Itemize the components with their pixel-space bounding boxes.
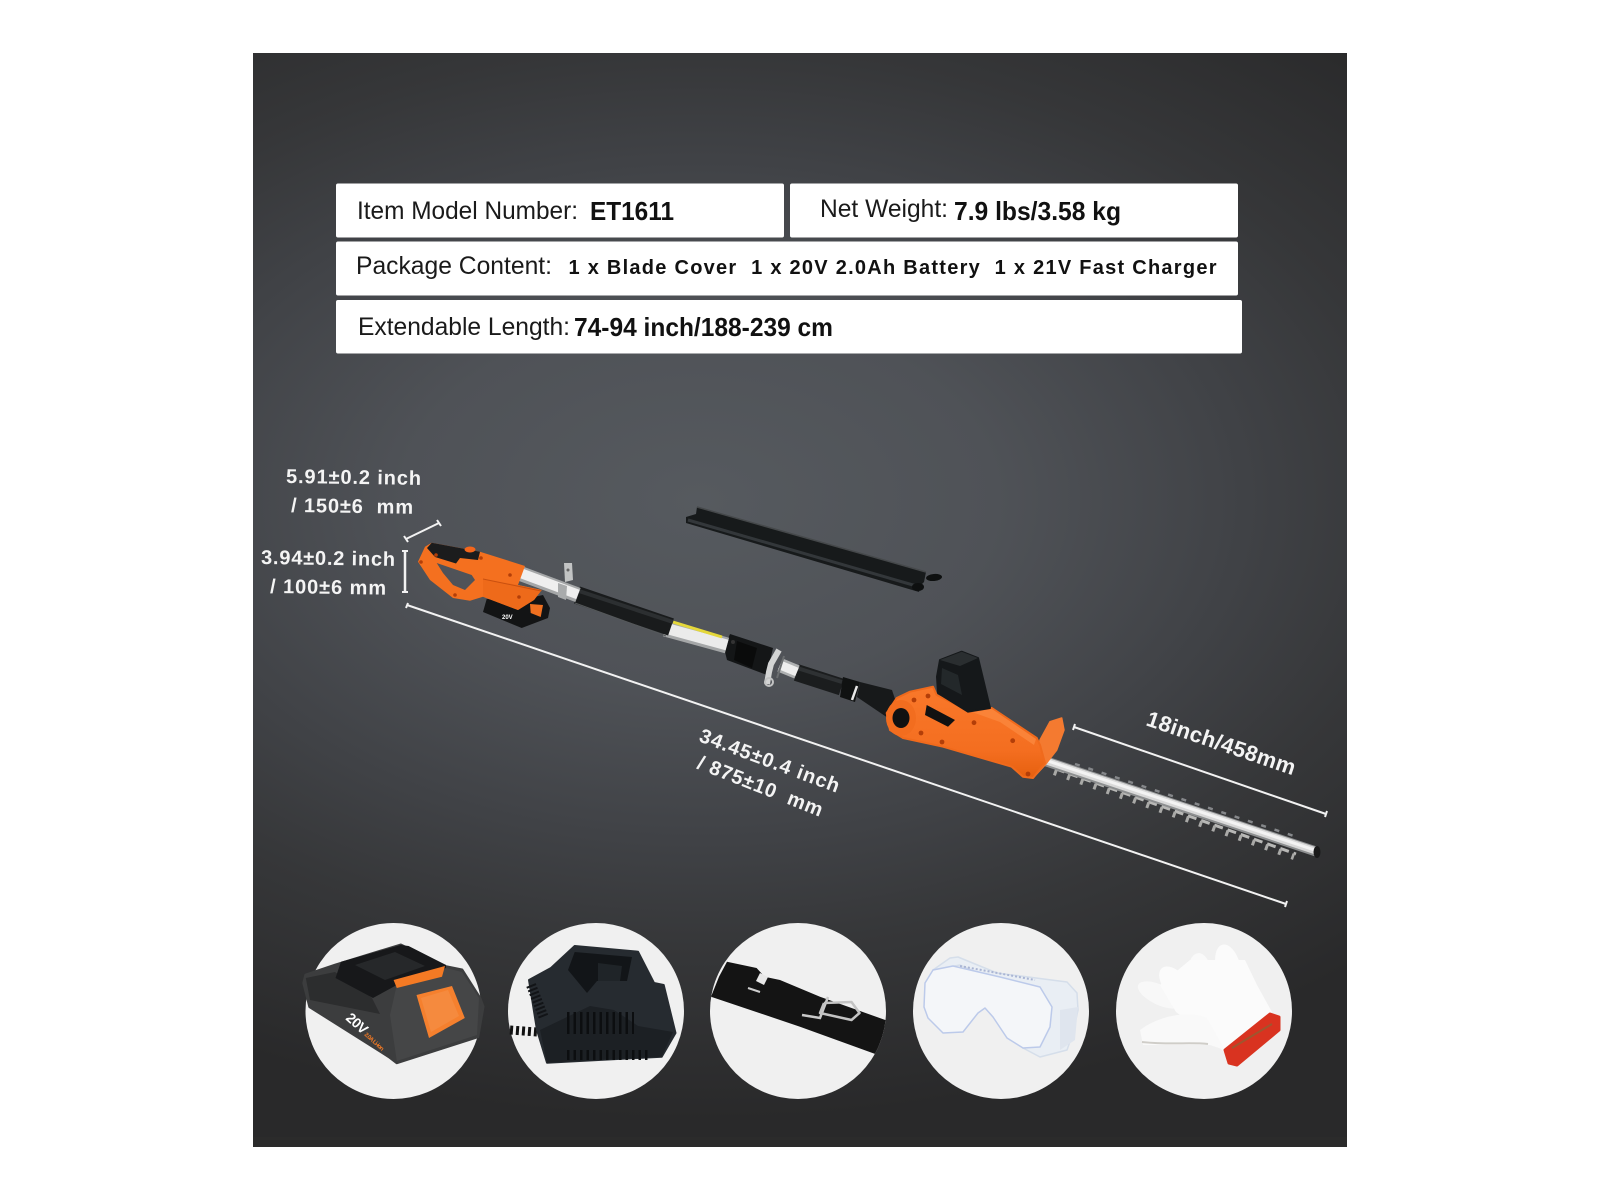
spec: net weight: 7.9 lbs/3.58 kg: [954, 196, 1121, 226]
spec: package content: Package Content:: [356, 252, 552, 280]
label: handle width: 5.91±0.2 inch: [286, 466, 421, 490]
rear silver tube and bracket: [519, 563, 578, 600]
accessory: charger: [508, 923, 684, 1099]
battery on trimmer: 20V: [502, 615, 513, 621]
motor cover: [937, 652, 990, 712]
spec: net weight: [790, 184, 1238, 238]
spec: extendable length: 74-94 inch/188-239 cm: [574, 312, 833, 342]
label: blade length: 18inch/458mm: [1143, 706, 1299, 780]
dimension: blade length: [1073, 724, 1327, 817]
blade bar: [1045, 760, 1320, 858]
label: handle height: 3.94±0.2 inch: [261, 547, 395, 571]
spec: extendable length: [336, 300, 1242, 354]
label: overall length: 34.45±0.4 inch: [696, 725, 843, 798]
spec: net weight: Net Weight:: [820, 195, 948, 223]
infographic canvas: [253, 53, 1347, 1147]
spec: package content: [336, 242, 1238, 296]
battery on trimmer: [483, 595, 550, 628]
dimension: handle width: [404, 520, 441, 542]
dimension: handle height: [402, 551, 408, 592]
accessory: work gloves: [1116, 923, 1292, 1099]
telescopic pole: front section: [780, 665, 896, 718]
telescopic pole: clamp collar: [724, 634, 784, 686]
blade cover: [686, 507, 942, 592]
accessory: battery: 20V: [343, 1009, 372, 1038]
dimension: overall length: [406, 603, 1287, 907]
motor head: [886, 652, 1064, 778]
spec: item model number: [336, 184, 784, 238]
spec: package content: 1 x Blade Cover 1 x 20V 2.0Ah Battery 1 x 21V Fast Charger: [568, 257, 1217, 279]
accessory: battery: 2.0A Li-ion: [363, 1032, 385, 1053]
label: handle height metric: / 100±6 mm: [270, 576, 386, 600]
accessory: battery: [304, 923, 483, 1099]
telescopic pole: middle section: [575, 591, 727, 646]
label: handle width metric: / 150±6 mm: [291, 495, 413, 519]
accessory: safety goggles: [913, 923, 1089, 1099]
spec: extendable length: Extendable Length:: [358, 313, 570, 341]
spec: item model number: Item Model Number:: [357, 197, 578, 225]
blade teeth: [1054, 764, 1300, 857]
accessory: shoulder strap: [710, 923, 890, 1099]
spec: item model number: ET1611: [590, 196, 674, 226]
dimension labels: [261, 466, 1299, 821]
dimension lines: [402, 520, 1327, 907]
label: overall length metric: / 875±10 mm: [694, 752, 826, 821]
spec table: [336, 184, 1242, 354]
rear handle: [418, 543, 542, 610]
accessory circles: [304, 923, 1292, 1099]
hedge trimmer: [418, 543, 1320, 858]
panel: dark background: [253, 53, 1347, 1147]
